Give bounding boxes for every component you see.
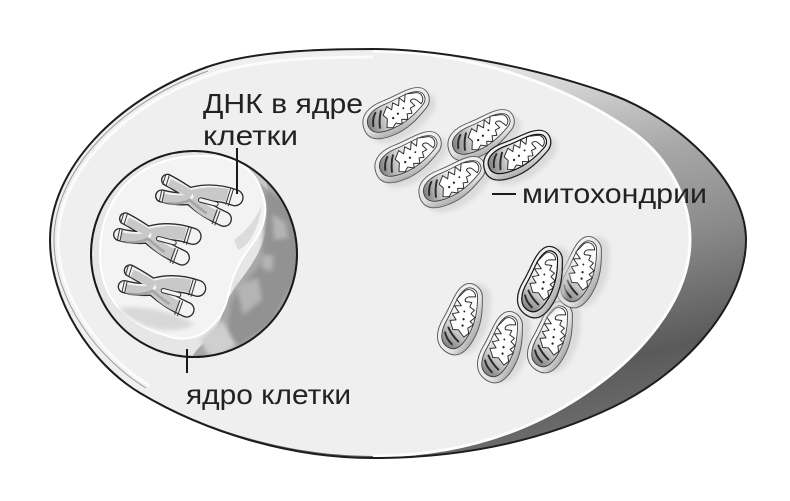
label: DNA second line: клетки: [203, 120, 298, 151]
mitochondria group 2: [425, 228, 627, 393]
mitochondrion: dark outline: [505, 238, 588, 328]
leader line: nucleus: [186, 349, 188, 373]
mitochondrion: [357, 83, 443, 149]
chromosome 2: [117, 213, 193, 264]
leader line: mitochondria: [492, 193, 516, 195]
mitochondrion: [413, 152, 499, 218]
cell: dark outer crescent: [50, 49, 746, 458]
mitochondrion: [442, 105, 528, 171]
mitochondrion: [465, 303, 548, 393]
nucleus: dark mottled region: [192, 168, 296, 356]
mitochondrion: [515, 293, 598, 383]
mitochondrion: [369, 127, 455, 193]
label: mitochondria: митохондрии: [522, 178, 707, 209]
nucleus of the cell: [91, 150, 310, 362]
chromosome 1: [159, 174, 235, 225]
leader line: DNA: [236, 148, 238, 194]
label: DNA in nucleus: ДНК в ядре: [203, 88, 363, 119]
mitochondrion: [425, 275, 508, 365]
label: nucleus: ядро клетки: [186, 379, 351, 410]
cell outline: [50, 49, 746, 458]
nucleus: light region: [100, 156, 265, 339]
cell: light cytoplasm: [51, 51, 690, 456]
mitochondrion: [544, 228, 627, 318]
chromosomes in nucleus: [117, 174, 235, 316]
chromosome 3: [122, 265, 198, 316]
mitochondrion: dark outline: [478, 126, 564, 190]
mitochondria group 1: [357, 83, 564, 218]
